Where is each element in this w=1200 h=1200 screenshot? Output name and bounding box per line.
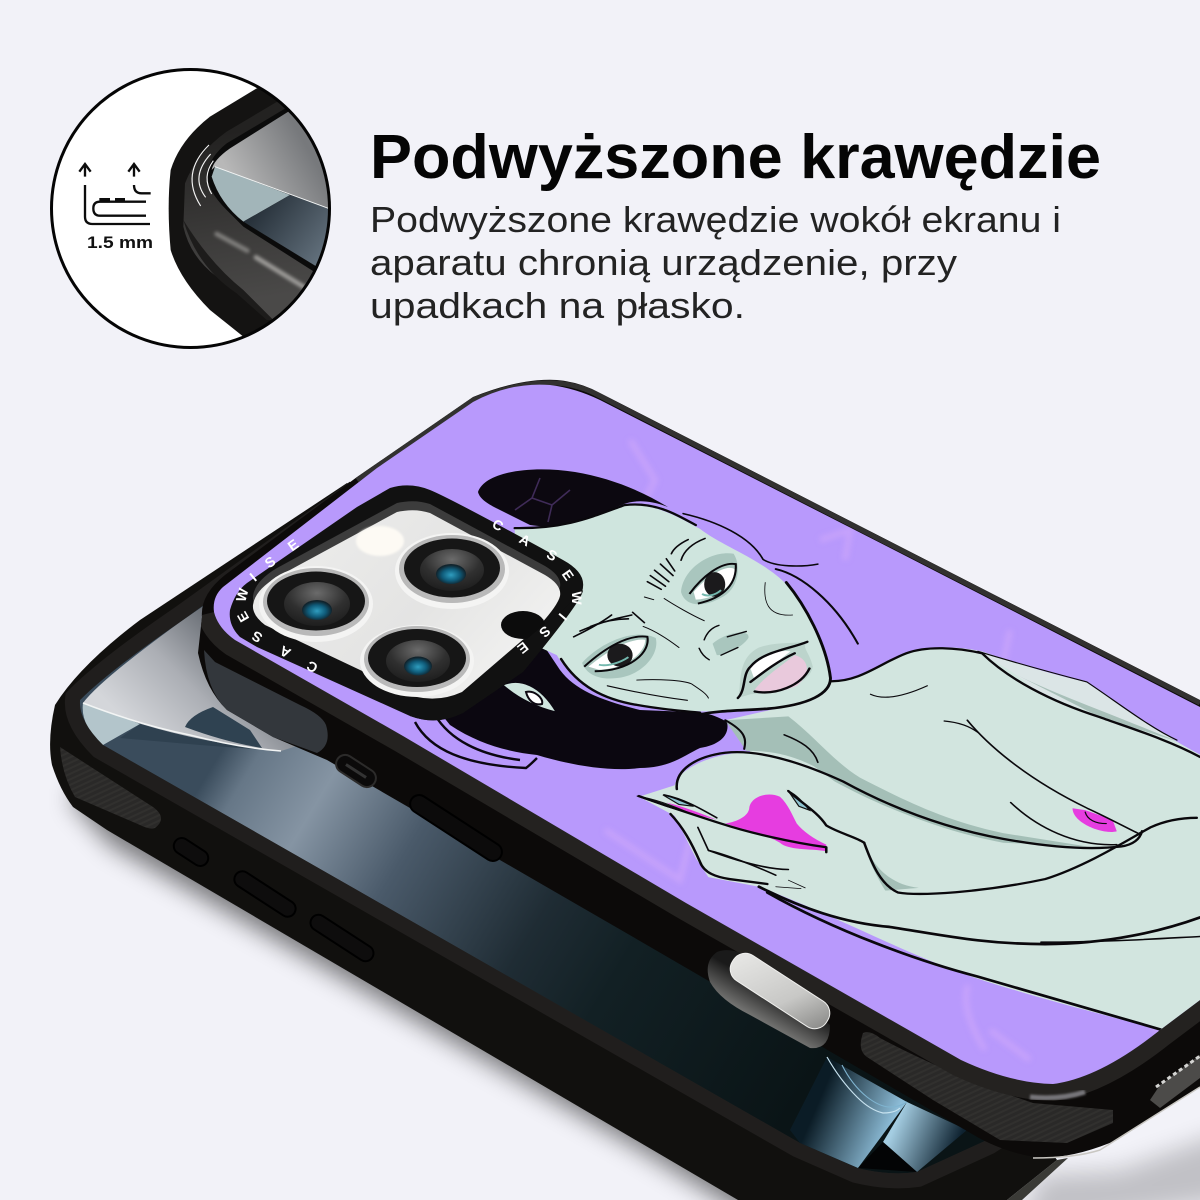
brand text: CASEWISE left: S (249, 628, 265, 646)
brand text: CASEWISE left: S (262, 553, 278, 571)
drop shadows under phones (70, 760, 1200, 1200)
outer translucent strip (1007, 1158, 1068, 1200)
title: Podwyższone krawędzie (370, 123, 1101, 192)
corner bumper (60, 747, 161, 829)
lower hair (445, 648, 728, 770)
brand text: CASEWISE right: A (517, 531, 533, 549)
ring band (230, 485, 583, 720)
circle border (52, 70, 330, 348)
brand text: CASEWISE left: A (277, 643, 293, 661)
screen gray (212, 112, 333, 208)
body shading (725, 716, 1087, 847)
nails (636, 796, 688, 812)
curved white arcs (192, 145, 213, 206)
upper hair (478, 469, 668, 526)
face (515, 505, 830, 711)
brand text: CASEWISE right: S (536, 623, 554, 641)
lens: lower (360, 625, 474, 697)
phone screen (80, 606, 984, 1174)
case highlights (217, 234, 247, 251)
edge highlight (1033, 1087, 1200, 1158)
description text (370, 199, 1061, 326)
brand text: CASEWISE left: W (233, 586, 252, 603)
rim highlight (1030, 1092, 1085, 1098)
brand text: CASEWISE right: I (556, 610, 570, 624)
chest mark (1073, 808, 1117, 832)
lips (738, 642, 813, 698)
heart (725, 795, 826, 851)
side button: action (171, 835, 211, 869)
camera plateau (253, 510, 560, 699)
lens: left (259, 566, 373, 642)
brand text: CASEWISE right: C (490, 516, 506, 534)
bottom corner bumper (861, 1032, 1113, 1143)
brand text: CASEWISE left: I (246, 570, 260, 584)
description text: Podwyższone krawędzie wokół ekranu i (370, 199, 1061, 240)
side button: power (407, 792, 505, 864)
hair strands (415, 715, 537, 768)
screen light wedge (212, 167, 290, 222)
front case shown from the back (198, 380, 1200, 1158)
brand text: CASEWISE left: E (234, 609, 252, 625)
face outlines (515, 504, 858, 714)
flash (356, 526, 404, 556)
camera ring (230, 485, 585, 720)
lens: upper right (395, 533, 509, 609)
illustration (415, 440, 1200, 1060)
case outer body (198, 380, 1200, 1157)
purple panel (214, 385, 1200, 1084)
charging port (708, 948, 835, 1048)
brand text: CASEWISE right: E (514, 639, 532, 657)
brand text: CASEWISE right: W (569, 591, 585, 605)
inner black rim (206, 108, 316, 271)
case body (50, 483, 1057, 1200)
description text: upadkach na płasko. (370, 285, 745, 326)
case rim (80, 500, 1010, 1173)
camera corner bumper (204, 650, 328, 753)
inset circle: raised edge close-up (52, 70, 340, 348)
icon: raised edge diagram (79, 164, 151, 224)
printed back panel (214, 385, 1200, 1084)
body outlines (639, 648, 1200, 1030)
lidar sensor (501, 611, 545, 639)
rim around back panel (214, 383, 1200, 1084)
nose (699, 625, 749, 660)
ring inner wall (253, 501, 560, 690)
ear piece (503, 682, 556, 712)
description text: aparatu chronią urządzenie, przy (370, 242, 957, 283)
brand text: CASEWISE right (490, 516, 585, 657)
edge height label: 1.5 mm (87, 233, 153, 252)
screen dark wedge (243, 195, 330, 267)
brand text: CASEWISE right: S (544, 546, 560, 564)
screen white line (215, 167, 328, 208)
rear phone with open case (50, 483, 1068, 1200)
side button: volume down (307, 912, 377, 964)
ring lower-right overlap (410, 590, 583, 720)
case corner close-up (168, 88, 278, 336)
side slot (333, 751, 379, 791)
body (639, 647, 1200, 1030)
lilac light streaks (605, 440, 1170, 1060)
hair veins (515, 478, 570, 522)
eyebrows and lashes (574, 538, 708, 698)
brand text: CASEWISE left: C (304, 658, 320, 676)
brand text: CASEWISE left: E (285, 536, 301, 554)
speaker grille (1150, 1055, 1200, 1108)
brand text: CASEWISE right: E (559, 567, 577, 583)
eye: upper (681, 553, 738, 604)
eye: lower (582, 635, 656, 679)
brand text: CASEWISE left (233, 536, 320, 676)
side button: volume up (231, 868, 299, 920)
pink under fingers (666, 803, 717, 820)
